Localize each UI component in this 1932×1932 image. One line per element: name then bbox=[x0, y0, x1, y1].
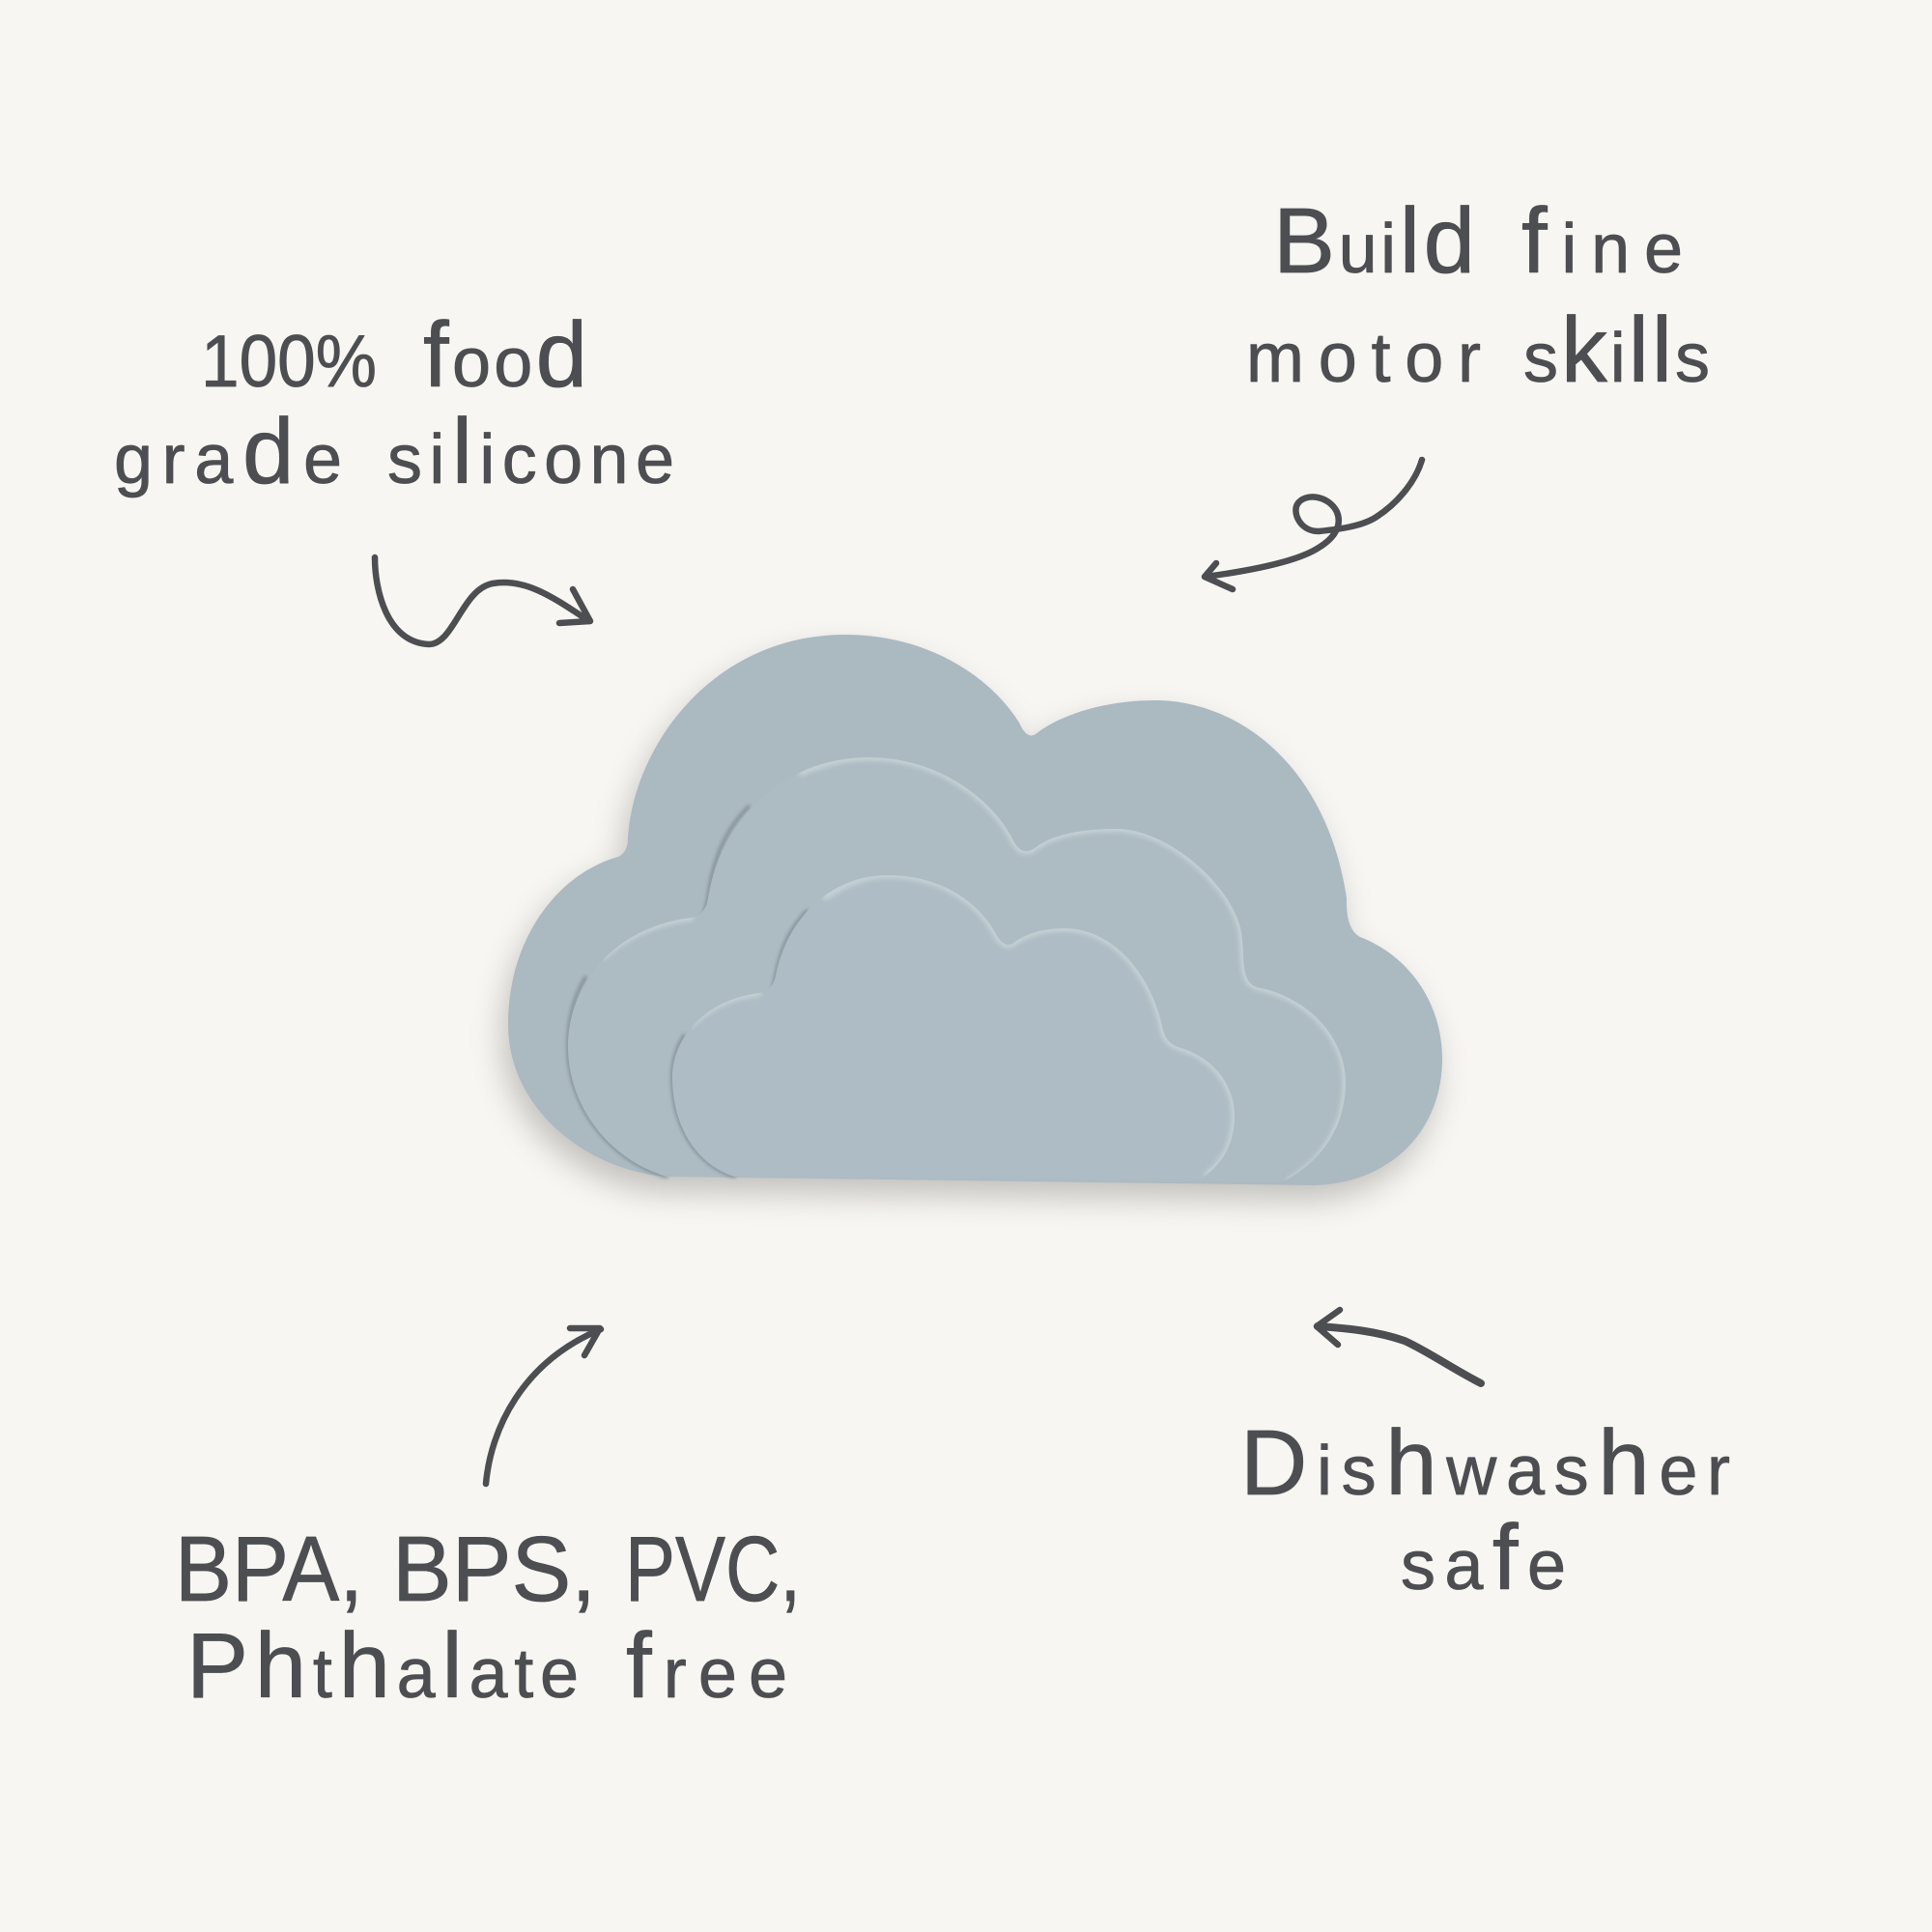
callout: Dishwasher safe bbox=[1240, 1411, 1730, 1609]
callout: BPA, BPS, PVC, Phthalate free: PVC, bbox=[625, 1518, 801, 1621]
large back cloud bbox=[508, 635, 1442, 1185]
product: stacked cloud teether bbox=[502, 635, 1442, 1201]
callout: BPA, BPS, PVC, Phthalate free: free bbox=[626, 1614, 787, 1718]
callout: Build fine motor skills bbox=[1246, 189, 1710, 402]
callout: Build fine motor skills: Build bbox=[1273, 189, 1475, 293]
middle cloud bbox=[568, 757, 1346, 1183]
small front cloud bbox=[672, 875, 1235, 1179]
callout: 100% food grade silicone: food bbox=[423, 303, 587, 407]
callout: BPA, BPS, PVC, Phthalate free: Phthalate bbox=[186, 1614, 579, 1718]
arrow: curved arrow from bottom left bbox=[486, 1328, 601, 1484]
callout: Build fine motor skills: motor bbox=[1246, 320, 1481, 397]
cloud shadow bbox=[502, 650, 1436, 1201]
arrow: looped arrow from top right bbox=[1205, 460, 1422, 589]
callout: 100% food grade silicone bbox=[114, 303, 674, 503]
callout: BPA, BPS, PVC, Phthalate free bbox=[175, 1518, 801, 1718]
callout: Dishwasher safe: Dishwasher bbox=[1240, 1411, 1730, 1515]
callout: 100% food grade silicone: 100% bbox=[201, 321, 377, 403]
callout: BPA, BPS, PVC, Phthalate free: BPA, bbox=[175, 1518, 363, 1621]
arrow: wavy arrow to cloud from top left bbox=[375, 557, 590, 644]
arrow: arrow from bottom right bbox=[1317, 1310, 1481, 1383]
callout: 100% food grade silicone: grade bbox=[114, 400, 342, 503]
callout: Build fine motor skills: skills bbox=[1523, 298, 1710, 402]
callout: 100% food grade silicone: silicone bbox=[387, 400, 674, 503]
callout: Build fine motor skills: fine bbox=[1521, 189, 1683, 293]
callout: BPA, BPS, PVC, Phthalate free: BPS, bbox=[392, 1518, 596, 1621]
callout: Dishwasher safe: safe bbox=[1401, 1506, 1566, 1609]
